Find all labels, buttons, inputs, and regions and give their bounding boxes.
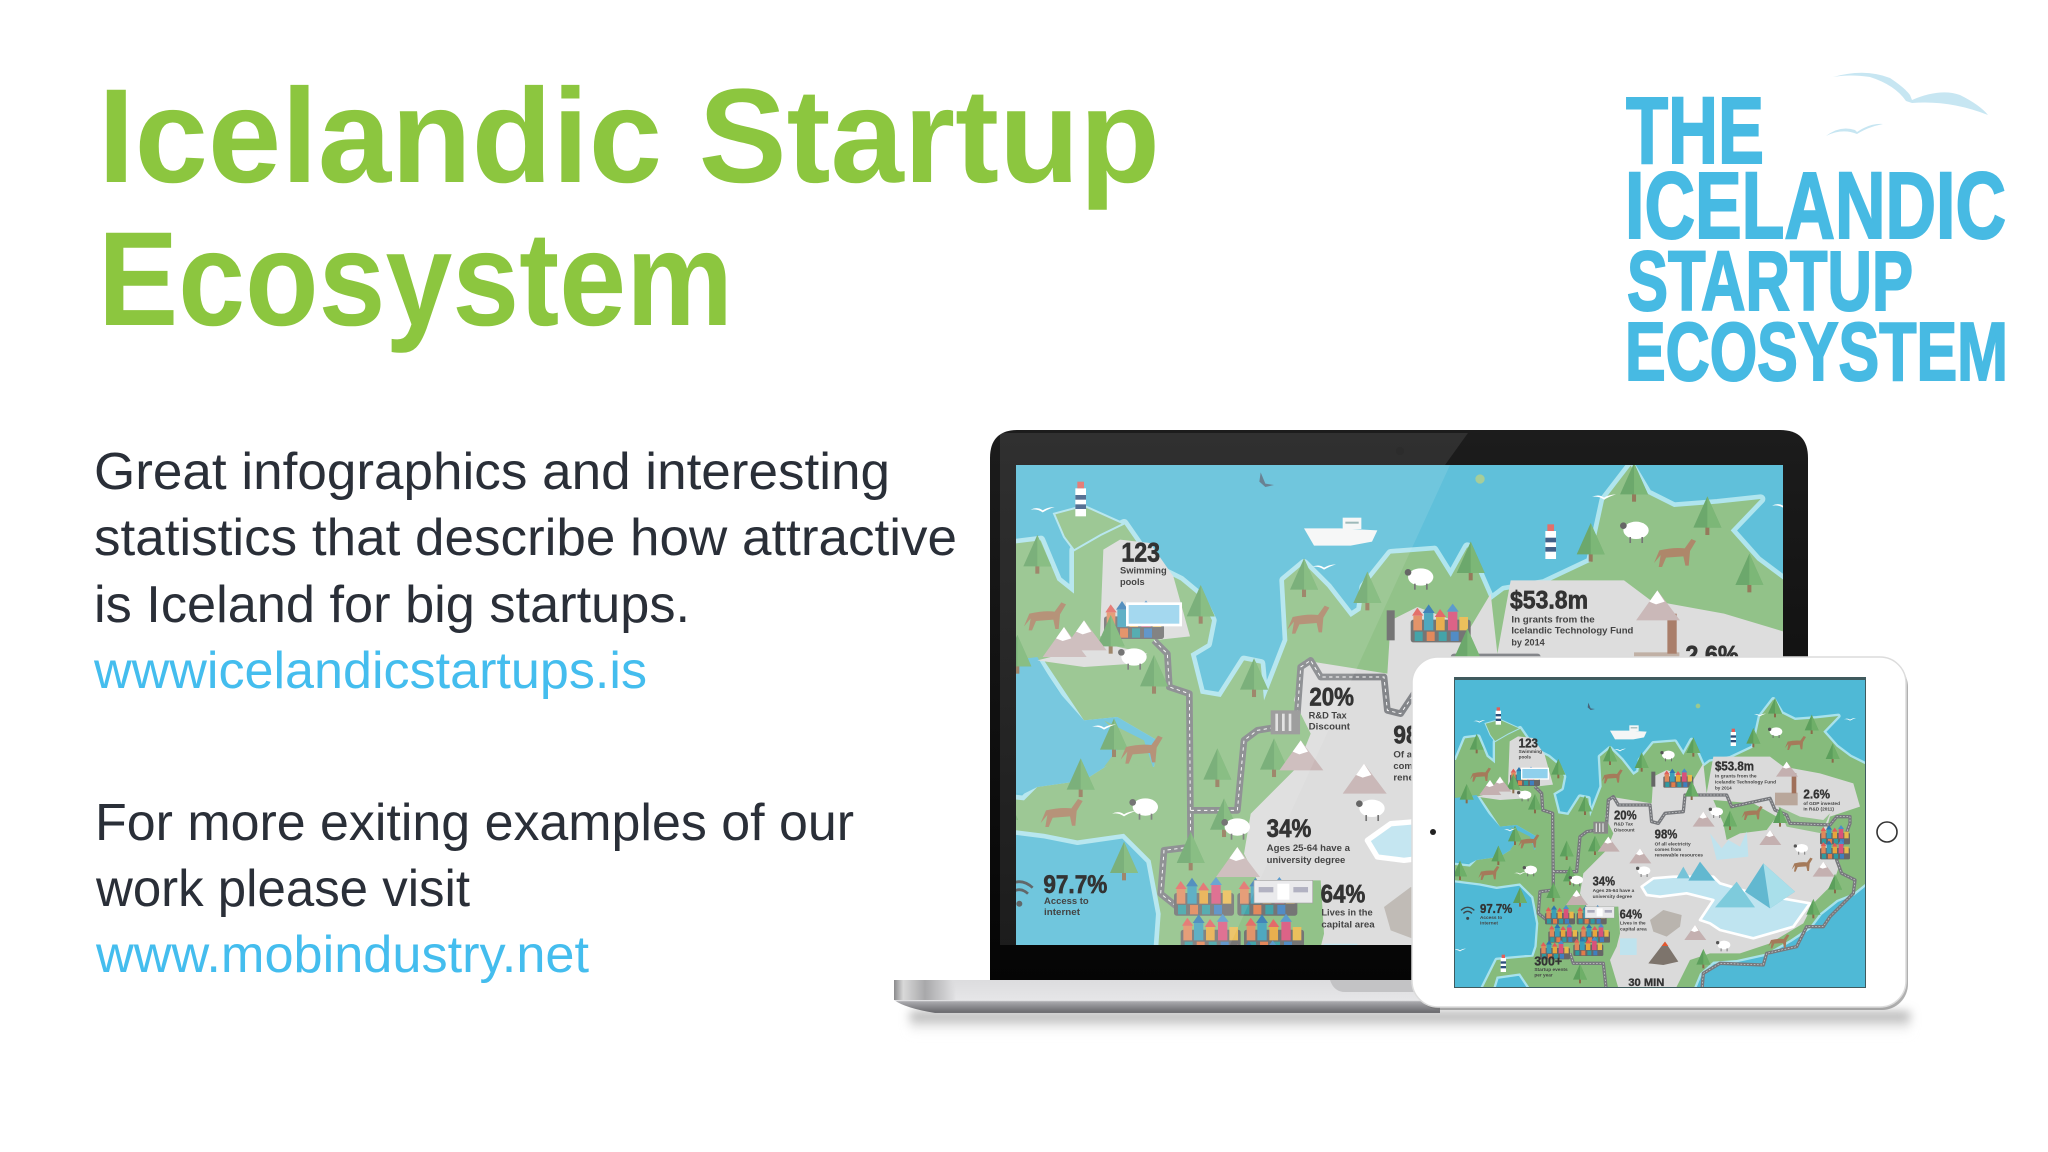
tablet screen map: 64%	[1620, 907, 1642, 921]
link: mobindustry: www.mobindustry.net	[95, 926, 590, 984]
laptop screen map: pools	[1120, 577, 1145, 587]
tablet camera	[1430, 829, 1436, 835]
laptop screen map: $53.8m	[1510, 586, 1588, 614]
laptop screen map: R&D Tax	[1309, 710, 1347, 720]
laptop base	[894, 980, 1440, 1013]
laptop screen map	[1016, 465, 1783, 945]
tablet screen map: 34%	[1593, 875, 1615, 889]
tablet screen map: Lives in the	[1620, 920, 1646, 925]
device: laptop	[894, 430, 1915, 1031]
laptop screen map: Discount	[1309, 722, 1350, 732]
tablet screen map	[1455, 680, 1865, 987]
tablet home button	[1877, 822, 1897, 842]
laptop screen map: Icelandic Technology Fund	[1511, 626, 1634, 636]
title	[98, 62, 1160, 354]
laptop screen map: comes from	[1393, 761, 1447, 771]
tablet screen map: comes from	[1655, 847, 1681, 852]
text block: intro: Great infographics and interesting	[94, 443, 890, 501]
title: Icelandic Startup	[98, 62, 1160, 211]
text block: intro: statistics that describe how attractive	[94, 509, 957, 567]
tablet screen map: renewable resources	[1655, 853, 1703, 858]
text block: more examples: For more exiting examples of our	[95, 794, 854, 852]
laptop bezel	[990, 430, 1808, 980]
laptop screen map: renewable resources	[1393, 772, 1490, 782]
tablet body	[1412, 657, 1906, 1007]
laptop screen map: 97.7%	[1043, 871, 1107, 899]
tablet screen map: 20%	[1614, 808, 1637, 822]
tablet screen map: per year	[1534, 973, 1553, 978]
laptop screen map: capital area	[1321, 920, 1376, 930]
tablet screen map: university degree	[1593, 894, 1632, 899]
tablet screen map: by 2014	[1715, 785, 1732, 790]
laptop screen map: 34%	[1267, 815, 1311, 843]
device: tablet	[1412, 657, 1920, 1027]
laptop screen map: 2.6%	[1685, 642, 1739, 670]
laptop screen map: Ages 25-64 have a	[1267, 843, 1351, 853]
tablet screen map: Access to	[1480, 915, 1502, 920]
text block: more examples: work please visit	[95, 860, 471, 918]
tablet screen map: 98%	[1655, 827, 1677, 841]
laptop screen map: 123	[1121, 538, 1160, 568]
tablet screen map: capital area	[1620, 926, 1647, 931]
laptop screen map: internet	[1044, 907, 1080, 917]
tablet screen map: Icelandic Technology Fund	[1715, 779, 1776, 784]
tablet screen map: Discount	[1614, 827, 1635, 832]
tablet screen map: in R&D (2011)	[1803, 807, 1834, 812]
link: icelandic startups: wwwicelandicstartups.is	[93, 642, 647, 700]
tablet screen map: 123	[1519, 735, 1538, 750]
logo: The Icelandic Startup Ecosystem: THE	[1626, 78, 1764, 184]
laptop screen map: In grants from the	[1511, 614, 1595, 624]
laptop screen map: 64%	[1321, 880, 1365, 908]
logo: The Icelandic Startup Ecosystem: STARTUP	[1627, 234, 1913, 328]
icon: seagulls	[1826, 73, 1988, 136]
tablet screen map: Swimming	[1519, 749, 1542, 754]
tablet screen map: In grants from the	[1715, 774, 1757, 779]
laptop screen map: 20%	[1309, 684, 1354, 712]
laptop screen map: 98%	[1393, 722, 1439, 750]
laptop screen map: university degree	[1267, 855, 1345, 865]
text block: intro: is Iceland for big startups.	[94, 576, 690, 634]
tablet screen map: 300+	[1534, 955, 1562, 969]
tablet screen map: R&D Tax	[1614, 822, 1633, 827]
title: Ecosystem	[98, 205, 733, 354]
text block: more examples	[95, 794, 854, 984]
tablet screen map: 30 MIN	[1628, 977, 1664, 989]
laptop screen map: Access to	[1044, 896, 1089, 906]
logo: The Icelandic Startup Ecosystem	[1625, 73, 2008, 398]
tablet screen map: 2.6%	[1803, 787, 1830, 801]
tablet screen map: of GDP invested	[1803, 801, 1840, 806]
tablet screen map: pools	[1519, 755, 1531, 760]
laptop screen map: Lives in the	[1321, 908, 1373, 918]
laptop screen map: by 2014	[1511, 638, 1545, 648]
tablet screen map: Startup events	[1534, 967, 1568, 972]
text block: intro	[93, 443, 957, 700]
tablet screen map: Ages 25-64 have a	[1593, 888, 1635, 893]
laptop screen map: Swimming	[1120, 565, 1167, 575]
tablet screen map: $53.8m	[1715, 760, 1754, 774]
tablet screen map: 97.7%	[1480, 902, 1512, 916]
tablet screen map: Of all electricity	[1655, 841, 1691, 846]
tablet screen map: internet	[1480, 920, 1498, 925]
laptop screen map: Of all electricity	[1393, 750, 1466, 760]
